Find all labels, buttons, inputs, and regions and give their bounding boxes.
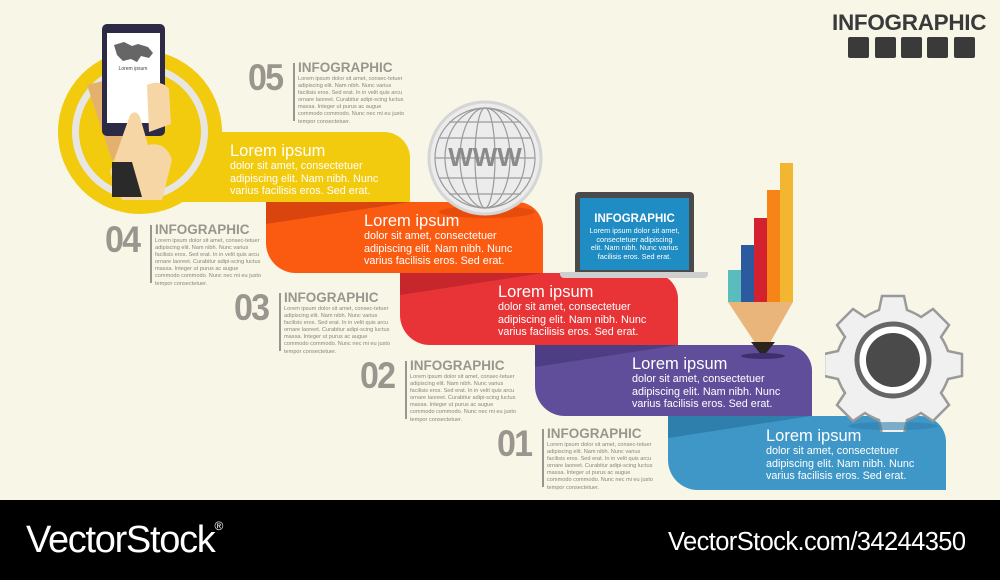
band: blue step 01: adipiscing elit. Nam nibh. Nunc [766, 458, 914, 470]
band: yellow step 05: dolor sit amet, consectetuer [230, 160, 363, 172]
step 02 text [360, 355, 516, 423]
step 01 text: INFOGRAPHIC [547, 426, 642, 441]
step 01 text [497, 423, 653, 491]
footer bar [0, 500, 1000, 580]
band: purple step 02 [535, 345, 812, 416]
step 05 text: Lorem ipsum dolor sit amet, consec-tetuer adipiscing elit. Nam nibh. Nunc varius facilisis eros. Sed erat. In in velit quis arcu ornare laoreet. Curabitur adipi-scing luctus massa. Integer ut purus ac augue commodo commodo. Nunc nec mi eu justo tempor consectetuer. [298, 76, 404, 125]
band: red step 03: adipiscing elit. Nam nibh. Nunc [498, 314, 646, 326]
step 01 text: 01 [497, 423, 531, 464]
step 02 text: Lorem ipsum dolor sit amet, consec-tetuer adipiscing elit. Nam nibh. Nunc varius facilisis eros. Sed erat. In in velit quis arcu ornare laoreet. Curabitur adipi-scing luctus massa. Integer ut purus ac augue commodo commodo. Nunc nec mi eu justo tempor consectetuer. [410, 374, 516, 423]
step 05 text: INFOGRAPHIC [298, 60, 392, 75]
step 02 text: 02 [360, 355, 394, 396]
icon: pencil bar chart [728, 163, 793, 359]
band: blue step 01 [668, 416, 946, 490]
icon: laptop: elit. Nam nibh. Nunc varius [591, 243, 678, 252]
icon: laptop: consectetuer adipiscing [596, 235, 673, 244]
icon: www globe [428, 100, 542, 218]
band: purple step 02: dolor sit amet, consectetuer [632, 373, 765, 385]
band: purple step 02: varius facilisis eros. Sed erat. [632, 398, 772, 410]
step 03 text: 03 [234, 287, 268, 328]
step 03 text [234, 287, 390, 355]
icon: hand with phone in circle: Lorem ipsum [119, 66, 147, 72]
band: red step 03 [400, 273, 678, 345]
icon: gear [825, 294, 964, 432]
band: purple step 02: Lorem ipsum [632, 355, 727, 373]
band: orange step 04: dolor sit amet, consectetuer [364, 230, 497, 242]
band: orange step 04 [266, 202, 543, 273]
band: blue step 01: Lorem ipsum [766, 427, 861, 445]
footer bar: VectorStock.com/34244350 [668, 528, 965, 556]
icon row [848, 37, 975, 58]
band: yellow step 05 [180, 132, 410, 202]
step 04 text: Lorem ipsum dolor sit amet, consec-tetuer adipiscing elit. Nam nibh. Nunc varius facilisis eros. Sed erat. In in velit quis arcu ornare laoreet. Curabitur adipi-scing luctus massa. Integer ut purus ac augue commodo commodo. Nunc nec mi eu justo tempor consectetuer. [155, 238, 261, 287]
band: yellow step 05: Lorem ipsum [230, 142, 325, 160]
icon: laptop [560, 192, 708, 278]
band: yellow step 05: varius facilisis eros. Sed erat. [230, 185, 370, 197]
icon: laptop: Lorem ipsum dolor sit amet, [589, 226, 680, 235]
step 03 text: Lorem ipsum dolor sit amet, consec-tetuer adipiscing elit. Nam nibh. Nunc varius facilisis eros. Sed erat. In in velit quis arcu ornare laoreet. Curabitur adipi-scing luctus massa. Integer ut purus ac augue commodo commodo. Nunc nec mi eu justo tempor consectetuer. [284, 306, 390, 355]
step 03 text: INFOGRAPHIC [284, 290, 378, 305]
step 05 text [248, 57, 404, 125]
step 04 text [105, 219, 261, 287]
band: orange step 04: Lorem ipsum [364, 212, 459, 230]
band: orange step 04: varius facilisis eros. Sed erat. [364, 255, 504, 267]
icon: hand with phone in circle [58, 24, 222, 214]
step 05 text: 05 [248, 57, 282, 98]
icon: laptop: facilisis eros. Sed erat. [598, 252, 671, 261]
icon: www globe: WWW [448, 142, 522, 172]
band: blue step 01: dolor sit amet, consectetuer [766, 445, 899, 457]
band: orange step 04: adipiscing elit. Nam nibh. Nunc [364, 243, 512, 255]
band: blue step 01: varius facilisis eros. Sed erat. [766, 470, 906, 482]
step 04 text: 04 [105, 219, 139, 260]
band: red step 03: varius facilisis eros. Sed erat. [498, 326, 638, 338]
step 02 text: INFOGRAPHIC [410, 358, 504, 373]
band: purple step 02: adipiscing elit. Nam nibh. Nunc [632, 386, 780, 398]
step 04 text: INFOGRAPHIC [155, 222, 250, 237]
band: yellow step 05: adipiscing elit. Nam nibh. Nunc [230, 173, 378, 185]
footer bar: VectorStock® [26, 519, 222, 561]
step 01 text: Lorem ipsum dolor sit amet, consec-tetuer adipiscing elit. Nam nibh. Nunc varius facilisis eros. Sed erat. In in velit quis arcu ornare laoreet. Curabitur adipi-scing luctus massa. Integer ut purus ac augue commodo commodo. Nunc nec mi eu justo tempor consectetuer. [547, 442, 653, 491]
title top right: INFOGRAPHIC [832, 10, 986, 35]
band: red step 03: Lorem ipsum [498, 283, 593, 301]
band: red step 03: dolor sit amet, consectetuer [498, 301, 631, 313]
icon: laptop: INFOGRAPHIC [594, 213, 675, 225]
